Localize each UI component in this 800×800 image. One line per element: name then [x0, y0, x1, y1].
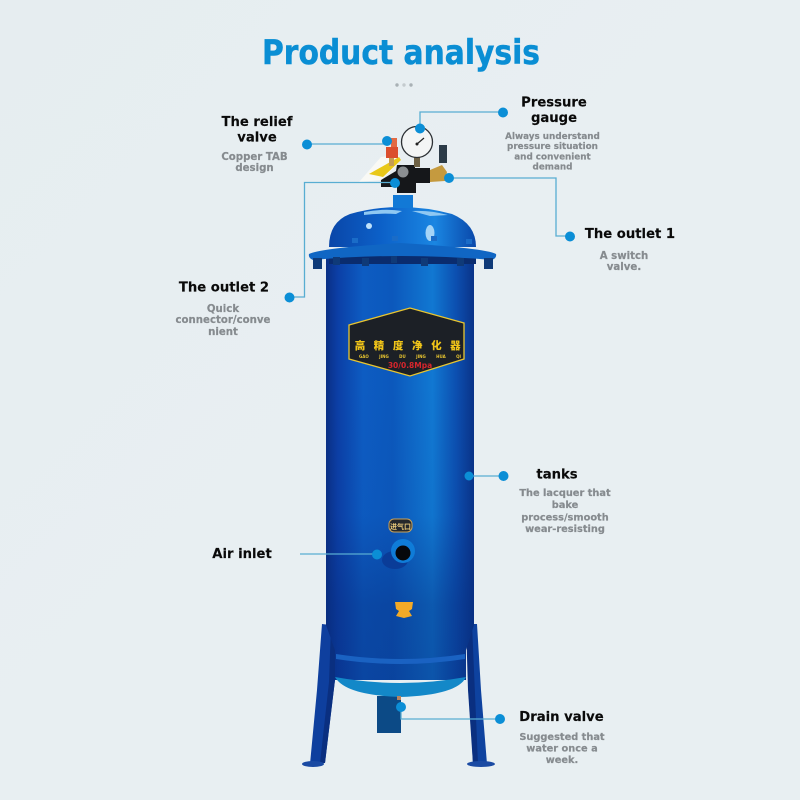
- lower weld ring: [336, 654, 465, 664]
- title page dots: [395, 83, 413, 87]
- callout: tanks: process/smooth: [521, 512, 609, 524]
- title: Product analysis: [262, 33, 540, 72]
- callout: pressure gauge: pressure situation: [507, 142, 598, 152]
- callout: outlet 2: The outlet 2: [179, 280, 269, 296]
- callout: drain valve: Drain valve: [519, 710, 604, 725]
- callout: tanks: bake: [552, 500, 579, 511]
- nameplate: [349, 308, 469, 376]
- lower dish: [335, 677, 466, 697]
- nameplate: GAO JING DU JING HUA QI: [359, 354, 462, 359]
- flange: [309, 236, 496, 269]
- callout: outlet 2: connector/conve: [176, 315, 271, 326]
- nameplate: 30/0.8Mpa: [388, 361, 432, 370]
- callout: pressure gauge: gauge: [531, 111, 577, 126]
- callout: pressure gauge: [415, 96, 600, 172]
- callout: pressure gauge: demand: [533, 162, 572, 172]
- dome: [329, 207, 476, 247]
- callout: relief valve: valve: [237, 130, 277, 146]
- callout: outlet 1: valve.: [607, 262, 641, 273]
- brass outlet valve: [430, 145, 447, 182]
- purifier tank illustration: [302, 126, 496, 767]
- callout: tanks: The lacquer that: [519, 488, 611, 499]
- left leg: [302, 624, 338, 767]
- callout: outlet 1: The outlet 1: [585, 227, 675, 242]
- callout: air inlet: Air inlet: [212, 547, 272, 562]
- callout: relief valve: Copper TAB: [221, 152, 288, 163]
- callout: tanks: tanks: [536, 468, 578, 482]
- callout: air inlet: [212, 547, 382, 562]
- callout: relief valve: [221, 115, 392, 174]
- relief valve: [386, 138, 398, 166]
- neck: [393, 195, 413, 208]
- callout: outlet 1: A switch: [600, 251, 648, 262]
- callout: relief valve: The relief: [221, 115, 293, 130]
- yellow tag: [359, 155, 400, 182]
- callout: drain valve: Suggested that: [519, 732, 605, 743]
- air inlet tag: 进气口: [390, 522, 411, 532]
- callout: outlet 2: Quick: [207, 304, 239, 315]
- tank body: [326, 258, 474, 680]
- valve block: [381, 165, 430, 193]
- drain bracket: [377, 696, 401, 733]
- nameplate: 高精度净化器: [355, 338, 469, 353]
- callout: tanks: wear-resisting: [525, 524, 605, 535]
- callout: outlet 2: nient: [208, 327, 238, 338]
- callout: relief valve: design: [235, 163, 274, 174]
- callout: outlet 1: [444, 173, 675, 273]
- pressure gauge: [402, 126, 432, 167]
- callout: tanks: [464, 468, 611, 535]
- yellow logo tag: [395, 602, 413, 618]
- callout: pressure gauge: and convenient: [514, 152, 591, 162]
- tank bottom stub: [397, 696, 401, 700]
- callout: pressure gauge: Always understand: [505, 132, 600, 142]
- callout: outlet 2: [176, 178, 400, 338]
- callout: drain valve: [396, 702, 605, 766]
- callout: drain valve: week.: [546, 755, 578, 766]
- callout: drain valve: water once a: [526, 744, 598, 754]
- callout: pressure gauge: Pressure: [521, 96, 587, 110]
- air inlet port: [382, 539, 415, 569]
- right leg: [466, 624, 495, 767]
